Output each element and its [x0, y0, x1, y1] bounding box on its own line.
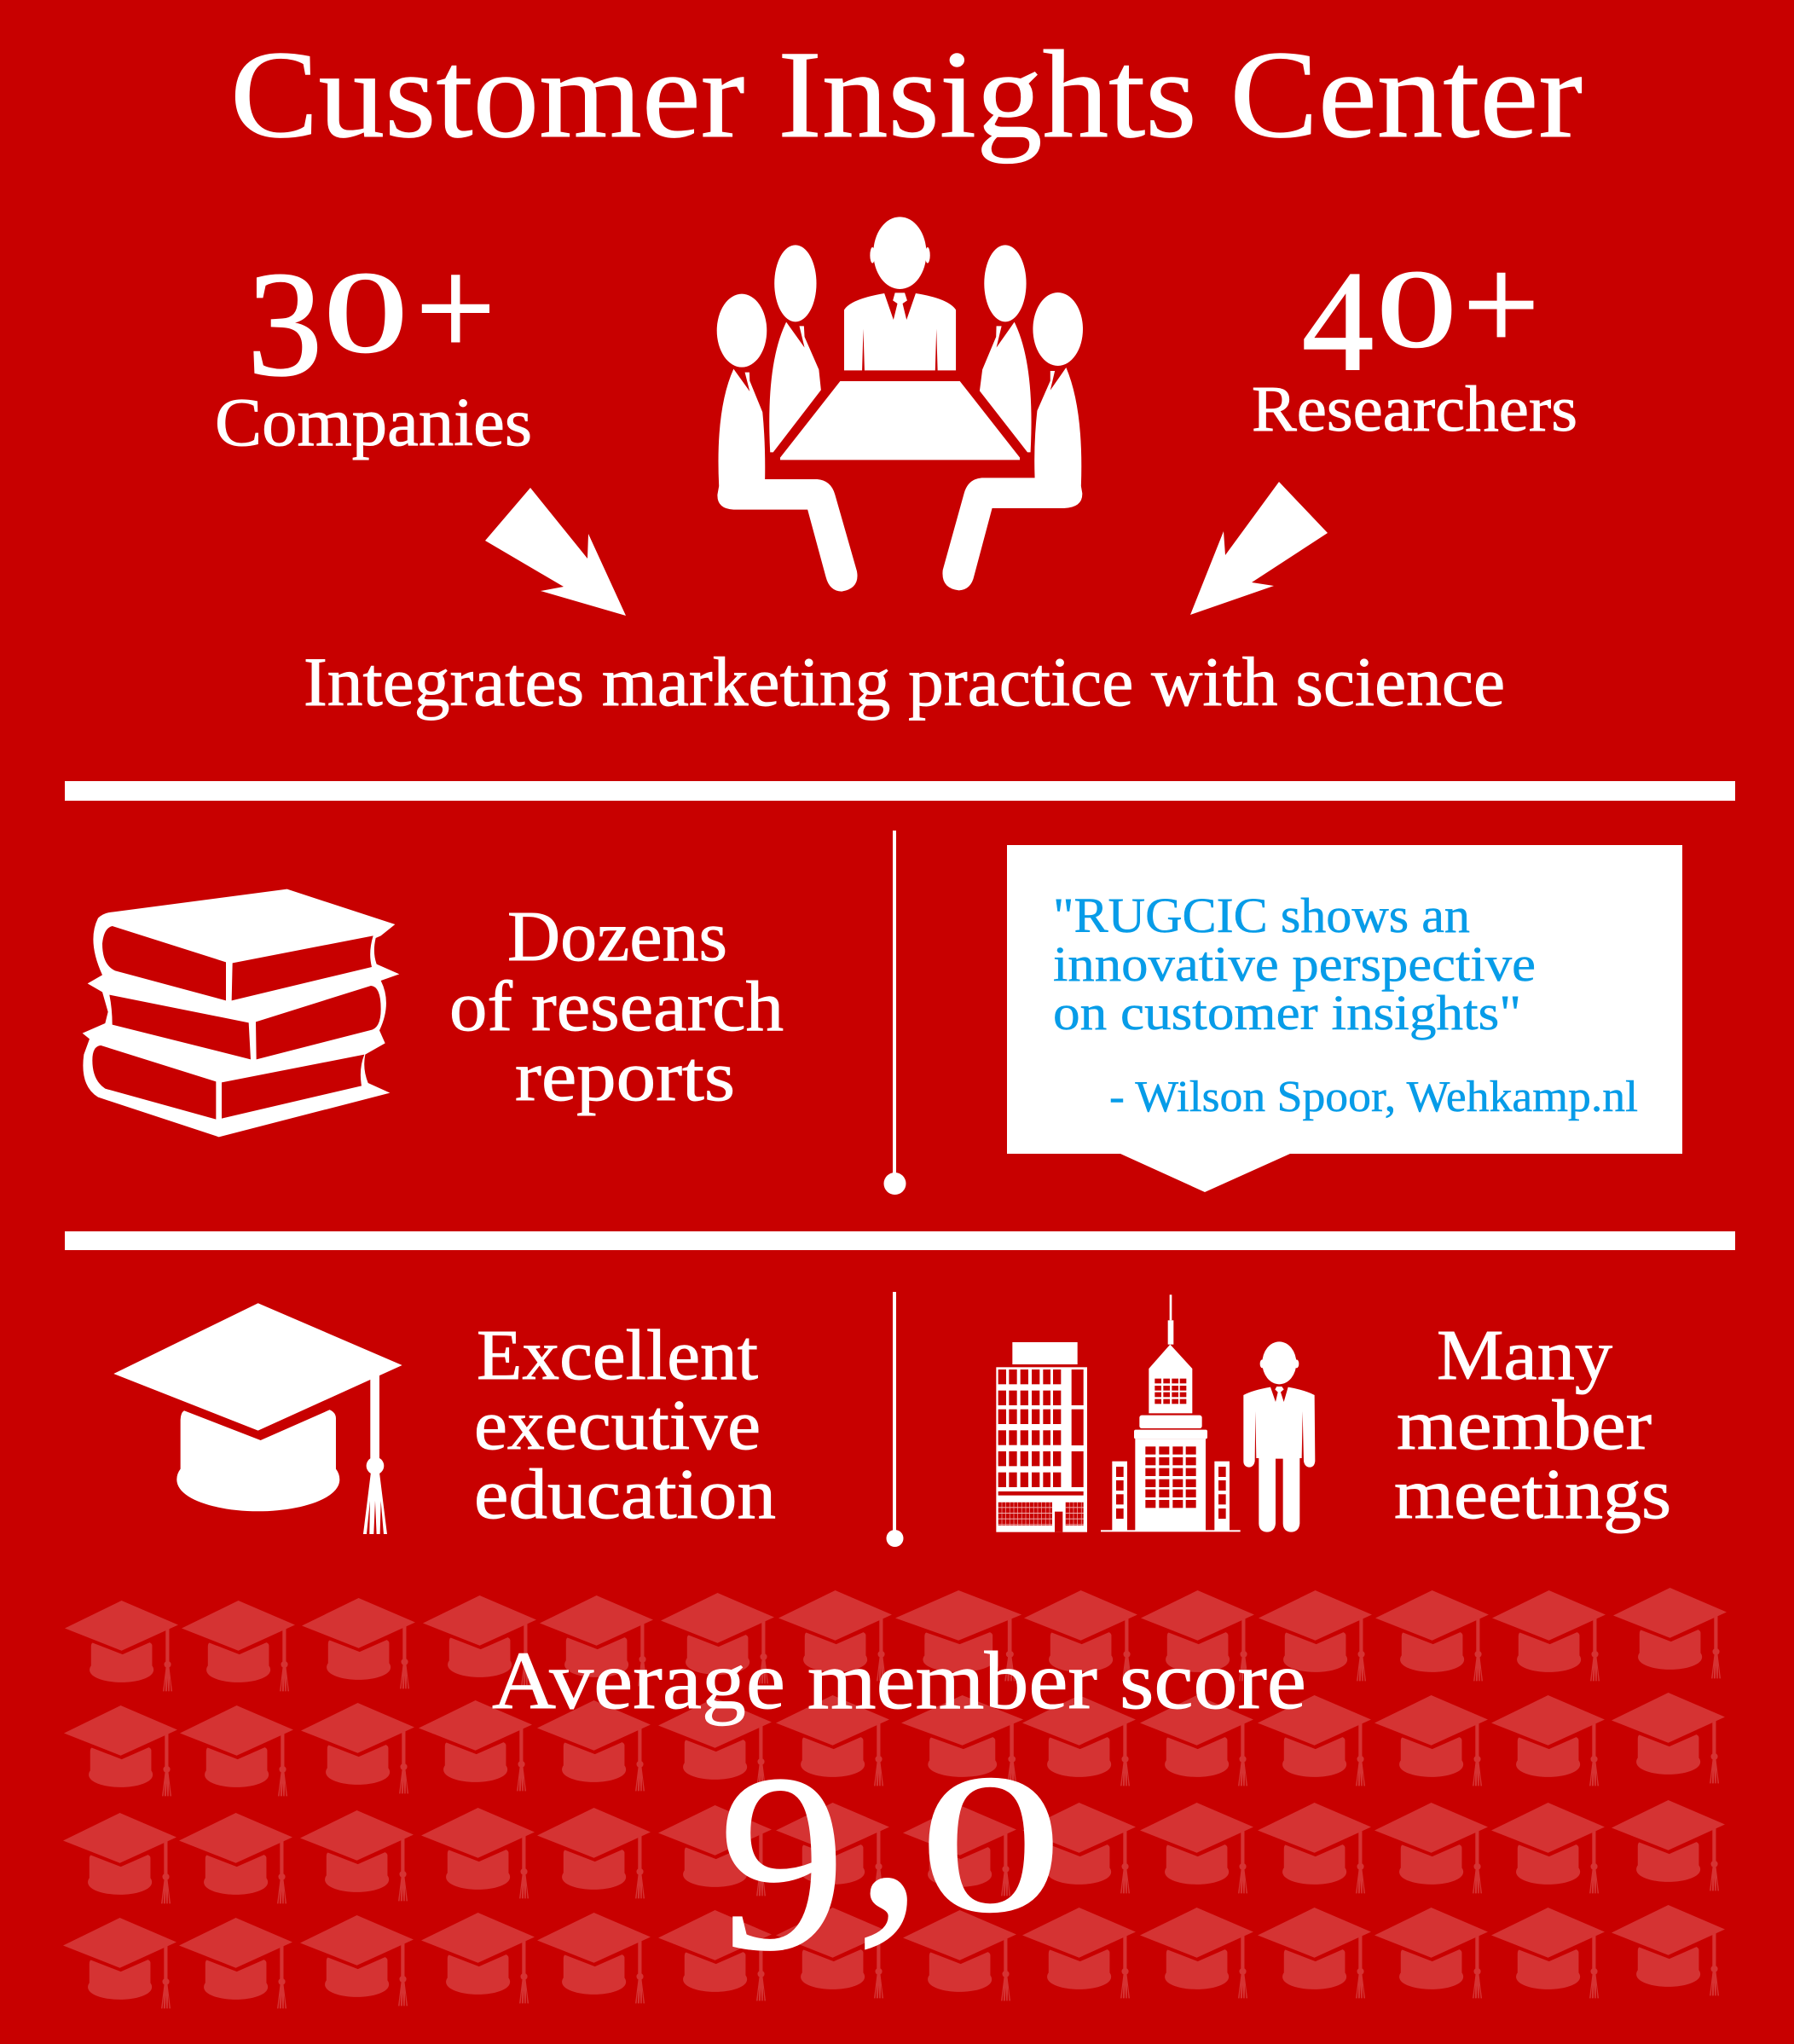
score value 9,0: 9: [719, 1723, 846, 2003]
statement: Integrates marketing practice with science: [304, 643, 1505, 721]
text: many member meetings: Many: [1437, 1316, 1612, 1395]
icon: graduation cap: [113, 1303, 402, 1534]
label Companies: Companies: [215, 385, 532, 460]
callout: testimonial quote: on customer insights": [1053, 985, 1521, 1040]
text: excellent executive education: [474, 1316, 776, 1534]
number 40+: 4: [1302, 242, 1374, 401]
text: dozens of research reports: reports: [515, 1037, 735, 1116]
stat: 30+ companies: [215, 229, 532, 460]
arrow: right pointing to statement: [1190, 482, 1328, 615]
callout: testimonial quote: [1007, 845, 1682, 1192]
title: Customer Insights Center: [230, 25, 1583, 164]
number 30+: 0: [324, 249, 408, 377]
arrow: left pointing to statement: [485, 488, 626, 616]
text: excellent executive education: education: [474, 1455, 776, 1534]
callout: testimonial quote: innovative perspective: [1053, 936, 1536, 992]
icon: stack of books: [83, 889, 399, 1137]
number 40+: 0: [1377, 248, 1456, 371]
score value 9,0: 0: [919, 1734, 1062, 1954]
stat: 40+ researchers: [1252, 230, 1577, 445]
text: excellent executive education: executive: [474, 1386, 761, 1465]
label Researchers: Researchers: [1252, 373, 1577, 445]
vertical divider with dot: [887, 1292, 904, 1547]
icon: buildings and businessman: [996, 1294, 1315, 1532]
vertical divider with dot: [883, 831, 906, 1195]
text: many member meetings: member: [1397, 1386, 1652, 1465]
text: dozens of research reports: [449, 897, 784, 1116]
number 40+: +: [1463, 230, 1539, 379]
number 30+: +: [416, 229, 495, 386]
text: dozens of research reports: of research: [449, 967, 784, 1046]
text: excellent executive education: Excellent: [477, 1316, 758, 1395]
callout: testimonial quote: "RUGCIC shows an: [1053, 888, 1470, 943]
score value 9,0: ,: [855, 1665, 923, 1966]
callout: testimonial quote: - Wilson Spoor, Wehkamp.nl: [1109, 1073, 1638, 1121]
icon: meeting around table: [717, 217, 1083, 592]
number 30+: 3: [247, 241, 322, 408]
text: dozens of research reports: Dozens: [507, 897, 727, 976]
text: many member meetings: meetings: [1394, 1455, 1671, 1534]
background pattern of graduation caps: [63, 1588, 1727, 2008]
text: many member meetings: [1394, 1316, 1671, 1534]
heading: average member score: Average member score: [492, 1635, 1306, 1726]
